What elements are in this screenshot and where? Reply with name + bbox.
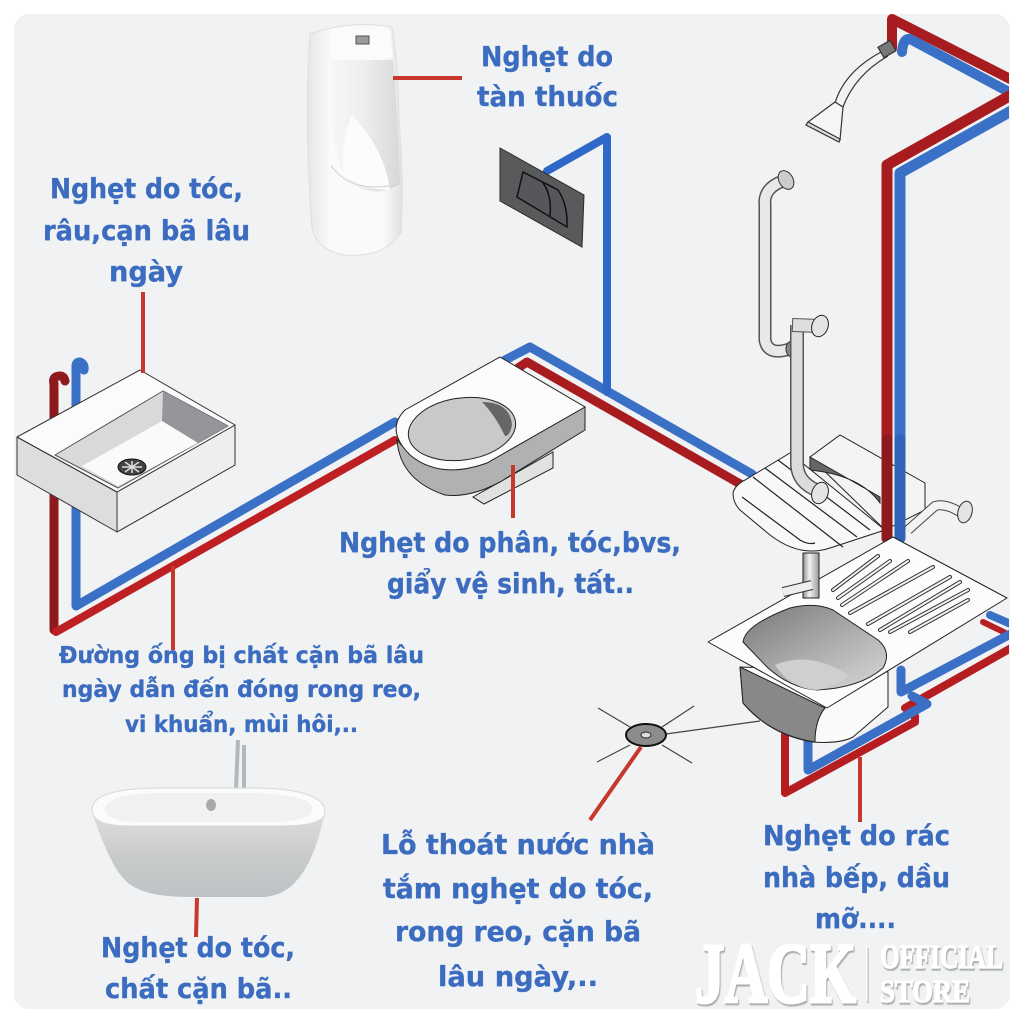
pipes: left run to wash basin xyxy=(54,366,395,632)
label: basin clog: ngày xyxy=(109,255,183,288)
label: basin clog xyxy=(43,172,250,288)
pipes: under kitchen sink xyxy=(785,615,1020,793)
fold-down shower seat xyxy=(733,313,925,551)
label: floor drain clog: tắm nghẹt do tóc, xyxy=(383,872,653,905)
label: toilet clog: Nghẹt do phân, tóc,bvs, xyxy=(339,526,681,559)
callout lines xyxy=(143,78,860,937)
label: bathtub clog: chất cặn bã.. xyxy=(105,972,292,1005)
label: bathtub clog: Nghẹt do tóc, xyxy=(101,931,295,964)
label: pipe residue: ngày dẫn đến đóng rong reo, xyxy=(62,676,421,703)
label: kitchen clog: Nghẹt do rác xyxy=(763,819,950,852)
label: pipe residue: Đường ống bị chất cặn bã lâu xyxy=(59,642,424,669)
label: cigarette clog: tàn thuốc xyxy=(477,80,618,113)
label: cigarette clog: Nghẹt do xyxy=(481,40,613,73)
shower head xyxy=(806,40,896,142)
label: basin clog: Nghẹt do tóc, xyxy=(50,172,243,205)
label: kitchen clog xyxy=(763,819,950,935)
wall grab bars xyxy=(765,168,798,357)
watermark logo: STORE xyxy=(880,973,970,1009)
bathtub xyxy=(92,740,325,897)
label: toilet clog xyxy=(339,526,681,600)
label: floor drain clog: lâu ngày,.. xyxy=(438,960,598,993)
wash basin xyxy=(17,370,235,532)
label: pipe residue: vi khuẩn, mùi hôi,.. xyxy=(125,710,358,738)
pipe riser over seat xyxy=(887,440,900,538)
kitchen sink xyxy=(708,537,1007,742)
label: kitchen clog: nhà bếp, dầu xyxy=(763,861,950,894)
label: pipe residue xyxy=(59,642,424,738)
label: basin clog: râu,cạn bã lâu xyxy=(43,214,250,247)
floor drain xyxy=(597,706,760,763)
label: floor drain clog: rong reo, cặn bã xyxy=(395,915,641,948)
urinal xyxy=(307,25,402,255)
label: toilet clog: giẩy vệ sinh, tất.. xyxy=(387,566,634,600)
seat side handle xyxy=(908,500,975,530)
watermark logo: JACK xyxy=(695,925,856,1021)
label: floor drain clog: Lỗ thoát nước nhà xyxy=(381,828,655,861)
label: cigarette clog xyxy=(477,40,618,113)
label: bathtub clog xyxy=(101,931,295,1005)
label: floor drain clog xyxy=(381,828,655,993)
label: kitchen clog: mỡ.... xyxy=(815,902,896,935)
basin taps xyxy=(54,362,84,384)
pipes: centre run behind toilet xyxy=(505,137,752,485)
wall-hung toilet xyxy=(396,357,585,504)
pipes: right riser and shower feed xyxy=(887,19,1020,538)
flush plate xyxy=(500,148,584,247)
